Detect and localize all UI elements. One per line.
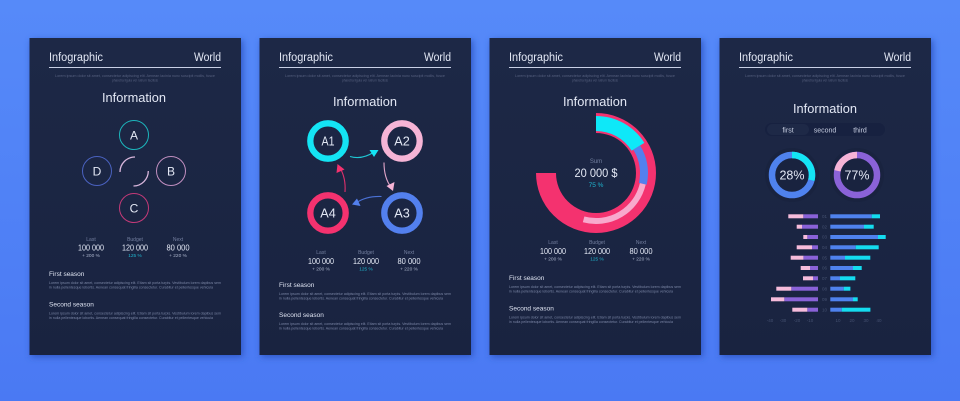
node A1: A1	[322, 134, 334, 148]
donut: 77%	[830, 148, 884, 202]
stats: + 220 %	[169, 253, 188, 259]
text block: first season: Lorem ipsum dolor sit amet, consectetur adipiscing elit. Etiam sit porta turpis. Vestibulum lorem dapibus sem	[49, 281, 221, 285]
title: Information	[333, 94, 397, 109]
stats: 125 %	[359, 266, 374, 272]
heading: Infographic World: Infographic	[509, 52, 563, 64]
stats: 100 000	[308, 256, 334, 266]
centre arcs	[120, 157, 148, 186]
stats: Next	[173, 237, 184, 243]
radial donut chart	[546, 123, 646, 223]
donut: 28%: 28%	[779, 168, 805, 182]
heading: Infographic World: Infographic	[739, 52, 793, 64]
tab selector: second	[814, 128, 836, 134]
row numbers: 03	[822, 235, 827, 240]
row numbers: 08	[822, 286, 827, 291]
chart centre label: 20 000 $	[574, 168, 618, 180]
stats: Next	[636, 240, 647, 246]
left bars	[784, 214, 818, 312]
axis labels: 20	[849, 318, 855, 323]
text block: second season: Lorem ipsum dolor sit amet, consectetur adipiscing elit. Etiam sit porta turpis. Vestibulum lorem dapibus sem	[49, 312, 221, 316]
donut: 77%: 77%	[844, 168, 870, 182]
text block: second season: Lorem ipsum dolor sit amet, consectetur adipiscing elit. Etiam sit porta turpis. Vestibulum lorem dapibus sem	[509, 316, 681, 320]
arrow: A4 to A1	[336, 164, 345, 192]
text block: second season: Second season	[279, 312, 324, 319]
circle C: C	[130, 202, 139, 216]
intro text: pharetra ligula vel rutrum facilisis	[342, 78, 388, 82]
heading: Infographic World	[49, 52, 221, 68]
stats: + 200 %	[544, 256, 563, 262]
chart centre label	[574, 159, 618, 189]
stats: + 200 %	[82, 253, 101, 259]
text block: first season: in nulla pellentesque lobortis. Aenean consequat fringilla consectetur. Curabitur et pellentesque vehicula	[279, 296, 443, 300]
intro text	[55, 74, 215, 82]
text block: second season	[279, 312, 451, 330]
stats: + 200 %	[312, 266, 331, 272]
stats: 125 %	[590, 256, 605, 262]
tab selector: first	[782, 128, 794, 134]
heading: Infographic World	[279, 52, 451, 68]
circle D: D	[93, 164, 102, 178]
text block: second season	[509, 306, 681, 324]
row numbers: 10	[822, 307, 827, 312]
arrow: A1 to A2	[350, 150, 378, 158]
heading: Infographic World: World	[424, 52, 451, 64]
intro text: pharetra ligula vel rutrum facilisis	[802, 78, 848, 82]
heading: Infographic World: World	[884, 52, 911, 64]
text block: first season	[509, 275, 681, 294]
donut: 28%	[765, 148, 819, 202]
text block: first season: Lorem ipsum dolor sit amet, consectetur adipiscing elit. Etiam sit porta turpis. Vestibulum lorem dapibus sem	[509, 285, 681, 289]
stats: 120 000	[122, 242, 148, 252]
axis labels: 40	[876, 318, 882, 323]
row numbers	[822, 214, 827, 312]
circle B: B	[167, 164, 175, 178]
stats: Budget	[127, 237, 144, 243]
heading: Infographic World	[739, 52, 911, 68]
circle A: A	[130, 128, 138, 142]
axis labels: -40	[767, 318, 774, 323]
intro text	[515, 74, 675, 82]
axis labels: 30	[863, 318, 869, 323]
text block: first season: Lorem ipsum dolor sit amet, consectetur adipiscing elit. Etiam sit porta turpis. Vestibulum lorem dapibus sem	[279, 292, 451, 296]
title: Information	[793, 101, 857, 116]
text block: first season: First season	[509, 275, 545, 282]
stats: Budget	[589, 240, 606, 246]
stats: Next	[404, 250, 415, 256]
intro text: pharetra ligula vel rutrum facilisis	[572, 78, 618, 82]
intro text: pharetra ligula vel rutrum facilisis	[112, 78, 158, 82]
chart centre label: Sum	[590, 159, 602, 165]
stats	[78, 237, 190, 259]
stats: Last	[316, 250, 326, 256]
axis labels: -30	[780, 318, 787, 323]
text block: second season: in nulla pellentesque lobortis. Aenean consequat fringilla consectetur. Curabitur et pellentesque vehicula	[509, 320, 673, 324]
row numbers: 01	[822, 214, 827, 219]
heading: Infographic World: World	[654, 52, 681, 64]
node A4: A4	[320, 206, 336, 220]
text block: second season	[49, 302, 221, 320]
heading: Infographic World: World	[194, 52, 221, 64]
text block: first season: First season	[279, 282, 315, 289]
text block: first season: in nulla pellentesque lobortis. Aenean consequat fringilla consectetur. Curabitur et pellentesque vehicula	[509, 290, 673, 294]
stats: 100 000	[78, 242, 104, 252]
stats	[308, 250, 421, 272]
heading: Infographic World: Infographic	[49, 52, 103, 64]
heading: Infographic World: Infographic	[279, 52, 333, 64]
stats: + 220 %	[400, 266, 419, 272]
diverging bar chart	[767, 214, 886, 323]
axis labels: -10	[807, 318, 814, 323]
title: Information	[102, 90, 166, 105]
row numbers: 02	[822, 224, 827, 229]
row numbers: 07	[822, 276, 827, 281]
right bars	[830, 214, 878, 312]
panel: donuts and bars	[720, 38, 933, 357]
intro text: Lorem ipsum dolor sit amet, consectetur adipiscing elit. Aenean lacinia nunc suscipit mollis, fusce	[515, 74, 675, 78]
row numbers: 09	[822, 297, 827, 302]
stats: 80 000	[398, 256, 421, 266]
text block: first season	[49, 271, 221, 290]
tab selector: third	[853, 128, 867, 134]
text block: first season: First season	[49, 271, 85, 278]
text block: second season: in nulla pellentesque lobortis. Aenean consequat fringilla consectetur. Curabitur et pellentesque vehicula	[279, 326, 443, 330]
intro text: Lorem ipsum dolor sit amet, consectetur adipiscing elit. Aenean lacinia nunc suscipit mollis, fusce	[285, 74, 445, 78]
text block: second season: Second season	[509, 306, 554, 312]
stats	[540, 240, 653, 262]
stats: 120 000	[584, 246, 610, 256]
intro text: Lorem ipsum dolor sit amet, consectetur adipiscing elit. Aenean lacinia nunc suscipit mollis, fusce	[55, 74, 215, 78]
stats: + 220 %	[632, 256, 651, 262]
stats: 100 000	[540, 246, 566, 256]
title: Information	[563, 94, 627, 109]
diagram: circles	[82, 120, 186, 222]
axis labels	[767, 318, 882, 323]
node A2: A2	[394, 134, 410, 148]
text block: second season: Lorem ipsum dolor sit amet, consectetur adipiscing elit. Etiam sit porta turpis. Vestibulum lorem dapibus sem	[279, 322, 451, 326]
stats: 80 000	[630, 246, 653, 256]
heading: Infographic World	[509, 52, 681, 68]
stats: Last	[548, 240, 558, 246]
node A3: A3	[394, 206, 410, 220]
text block: second season: in nulla pellentesque lobortis. Aenean consequat fringilla consectetur. Curabitur et pellentesque vehicula	[49, 316, 213, 320]
intro text	[285, 74, 445, 82]
diagram: cycle	[310, 123, 420, 231]
chart centre label: 75 %	[589, 182, 604, 189]
panel: circles ABCD	[30, 38, 243, 357]
axis labels: 10	[835, 318, 841, 323]
stats: Last	[86, 237, 96, 243]
panel: cycle A1-A4	[260, 38, 473, 357]
row numbers: 05	[822, 255, 827, 260]
row numbers: 06	[822, 266, 827, 271]
stats: 120 000	[353, 256, 379, 266]
tab selector	[765, 123, 885, 136]
stats: 80 000	[166, 242, 190, 252]
arrow: A2 to A3	[384, 162, 394, 191]
axis labels: -20	[794, 318, 801, 323]
panel: radial chart	[490, 38, 703, 357]
text block: first season	[279, 282, 451, 300]
stats: 125 %	[128, 253, 143, 259]
stats: Budget	[358, 250, 375, 256]
text block: first season: in nulla pellentesque lobortis. Aenean consequat fringilla consectetur. Curabitur et pellentesque vehicula	[49, 286, 213, 290]
row numbers: 04	[822, 245, 827, 250]
intro text: Lorem ipsum dolor sit amet, consectetur adipiscing elit. Aenean lacinia nunc suscipit mollis, fusce	[745, 74, 905, 78]
arrow: A3 to A4	[352, 196, 382, 206]
intro text	[745, 74, 905, 82]
text block: second season: Second season	[49, 302, 94, 308]
